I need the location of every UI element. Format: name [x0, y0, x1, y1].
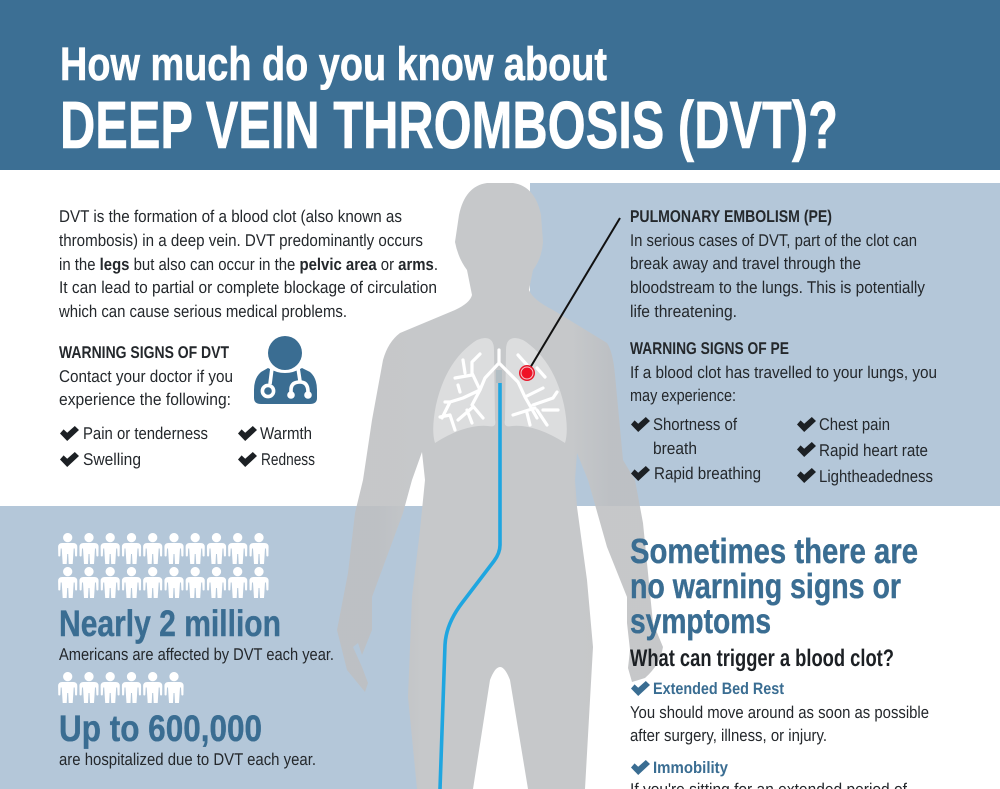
lungs: [433, 338, 567, 443]
text block: DVT intro: in the legs but also can occur in the pelvic area or arms.: [59, 255, 438, 274]
icon: doctor: [254, 336, 317, 404]
list: PE warning signs: Rapid breathing: [654, 464, 761, 483]
text block: contact your doctor: [59, 367, 233, 409]
panel: statistics background: [0, 506, 425, 789]
bronchi: [440, 350, 558, 430]
statistic: nearly 2 million: Americans are affected by DVT each year.: [59, 645, 334, 664]
list: PE warning signs: Lightheadedness: [819, 467, 933, 486]
text block: PE warning intro: If a blood clot has travelled to your lungs, you: [630, 363, 937, 382]
statistic: up to 600,000: Up to 600,000: [59, 708, 262, 749]
trigger: extended bed rest: You should move around as soon as possible: [630, 703, 929, 722]
text block: DVT intro: which can cause serious medical problems.: [58, 302, 347, 321]
text block: DVT intro: It can lead to partial or complete blockage of circulation: [59, 278, 437, 297]
heading: no warning signs: Sometimes there are: [630, 532, 918, 571]
text block: PE description: life threatening.: [630, 302, 737, 321]
text block: DVT intro: DVT is the formation of a blood clot (also known as: [59, 207, 402, 226]
list: PE warning signs: Rapid heart rate: [819, 441, 928, 460]
title: How much do you know about: [60, 37, 607, 90]
statistic: up to 600,000: are hospitalized due to DVT each year.: [59, 750, 316, 769]
trigger: immobility: [630, 759, 907, 789]
trigger: extended bed rest: after surgery, illness, or injury.: [630, 726, 827, 745]
heading: warning signs of PE: WARNING SIGNS OF PE: [630, 339, 789, 358]
text block: DVT intro: thrombosis) in a deep vein. DVT predominantly occurs: [59, 231, 423, 250]
title: [60, 37, 838, 163]
heading: no warning signs: [630, 532, 918, 641]
text block: PE description: [630, 231, 925, 321]
trigger: extended bed rest: [630, 680, 929, 745]
right lung: [505, 338, 567, 443]
text block: contact your doctor: experience the following:: [59, 390, 231, 409]
heading: pulmonary embolism: PULMONARY EMBOLISM (PE): [630, 207, 832, 226]
icon array: people, 600,000: [58, 672, 184, 703]
statistic: up to 600,000: [59, 708, 316, 769]
trigger: immobility: Immobility: [653, 759, 729, 777]
header band: [0, 0, 1000, 170]
body silhouette: [337, 183, 663, 789]
panel: pulmonary embolism background: [530, 183, 1000, 506]
heading: what can trigger a blood clot: What can trigger a blood clot?: [630, 645, 894, 672]
list: PE warning signs: [631, 415, 933, 486]
list: DVT warning signs: Swelling: [83, 450, 141, 469]
statistic: nearly 2 million: Nearly 2 million: [59, 603, 281, 644]
statistic: nearly 2 million: [59, 603, 334, 664]
list: DVT warning signs: Pain or tenderness: [83, 424, 208, 443]
text block: DVT intro: [58, 207, 438, 321]
heading: no warning signs: no warning signs or: [630, 567, 901, 606]
text block: PE description: bloodstream to the lungs. This is potentially: [630, 278, 925, 297]
heading: warning signs of DVT: WARNING SIGNS OF DVT: [59, 343, 230, 362]
list: DVT warning signs: [60, 424, 315, 469]
list: PE warning signs: Chest pain: [819, 415, 890, 434]
text block: PE warning intro: [630, 363, 937, 405]
trigger: extended bed rest: Extended Bed Rest: [653, 680, 784, 698]
left lung: [433, 338, 495, 443]
text block: PE warning intro: may experience:: [630, 386, 736, 405]
icon array: people, 2 million: [58, 533, 269, 598]
heading: no warning signs: symptoms: [630, 602, 771, 641]
list: PE warning signs: breath: [653, 439, 697, 458]
list: PE warning signs: Shortness of: [653, 415, 737, 434]
text block: contact your doctor: Contact your doctor if you: [59, 367, 233, 386]
text block: PE description: break away and travel through the: [630, 254, 861, 273]
callout: clot marker and pointer line: [519, 218, 620, 381]
vein line: [440, 383, 500, 789]
list: DVT warning signs: Redness: [261, 450, 315, 469]
text block: PE description: In serious cases of DVT, part of the clot can: [630, 231, 917, 250]
trachea base: [496, 370, 502, 383]
list: DVT warning signs: Warmth: [260, 424, 312, 443]
